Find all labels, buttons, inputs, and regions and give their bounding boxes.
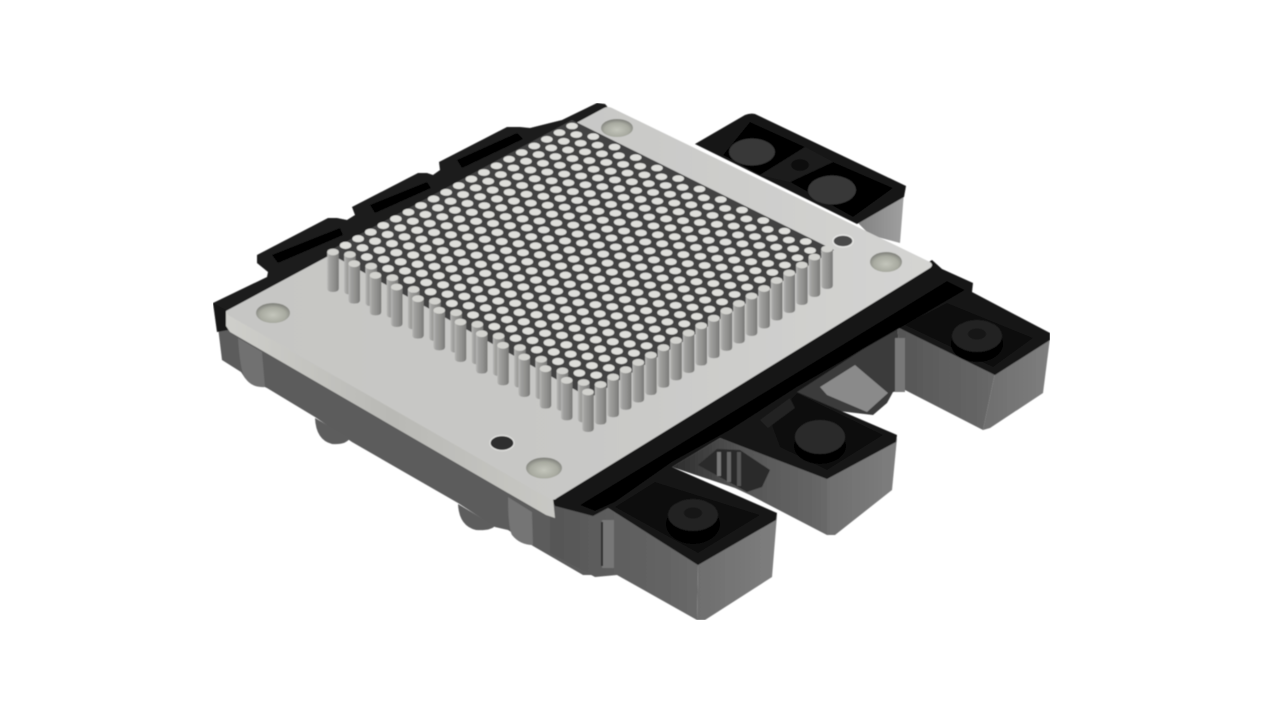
rail slot xyxy=(580,281,965,511)
rear connector module xyxy=(695,114,906,243)
plate mounting hole right xyxy=(870,252,902,272)
plate mounting hole left xyxy=(256,303,290,323)
module 3 well and screw xyxy=(905,303,1033,367)
base plate side edge xyxy=(226,311,555,518)
small locating hole bottom xyxy=(490,436,514,450)
black rail and module rims xyxy=(548,260,1050,565)
rear black frame with connector slots xyxy=(213,103,612,330)
mounting stud left xyxy=(315,418,350,444)
housing bump left xyxy=(238,338,265,387)
module 2 well and cap xyxy=(760,393,883,470)
lower housing wall xyxy=(213,303,610,575)
pin-fin array tops xyxy=(327,120,834,398)
base plate top surface xyxy=(226,107,932,500)
front module side walls xyxy=(550,327,1050,620)
mounting stud right xyxy=(458,504,495,530)
softened product artwork xyxy=(213,103,1050,620)
pin-fin edge row, front-right side xyxy=(595,246,833,425)
window between modules xyxy=(698,449,770,492)
pin-fin edge row, front-left side xyxy=(327,249,594,432)
small locating hole right xyxy=(833,235,853,247)
housing bump right xyxy=(508,497,533,545)
plate mounting hole bottom xyxy=(526,458,562,478)
pin-fin second row, front-left side xyxy=(344,251,589,422)
black left corner strip xyxy=(213,303,228,332)
module 1 well and screw xyxy=(615,482,760,553)
plate mounting hole top xyxy=(601,119,633,137)
